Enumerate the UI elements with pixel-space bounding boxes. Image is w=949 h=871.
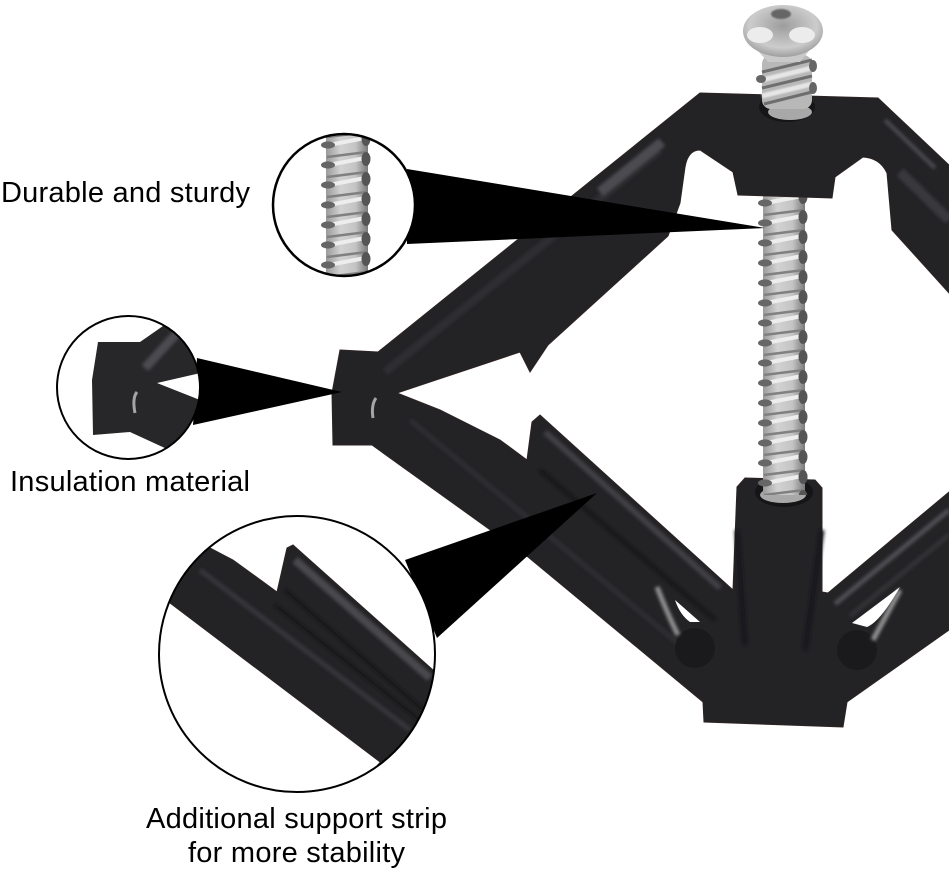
- screw: neck, collar and head: [743, 5, 823, 122]
- label: durable and sturdy: Durable and sturdy: [1, 177, 250, 209]
- pointer wedge: strip: [405, 493, 597, 638]
- label: additional support strip: Additional support strip: [146, 803, 447, 835]
- anchor product photo: [332, 5, 949, 727]
- callout: insulation material: [10, 316, 342, 498]
- pointer wedge: screw: [407, 169, 765, 244]
- anchor ridges and highlights: [385, 120, 949, 650]
- left slot: [657, 587, 715, 668]
- callout: additional support strip: [146, 493, 597, 869]
- magnifier: support strip: [158, 515, 436, 793]
- label: for more stability: for more stability: [188, 837, 406, 869]
- right slot: [837, 587, 900, 670]
- post screw entry and collar: [755, 469, 813, 507]
- pointer wedge: block: [193, 358, 342, 425]
- label: insulation material: Insulation material: [10, 466, 250, 498]
- magnifier: screw thread: [273, 131, 415, 291]
- insulation mark: [372, 398, 376, 418]
- anchor body: [332, 93, 949, 727]
- screw: threaded shaft: [758, 189, 810, 499]
- magnifier: corner block: [57, 316, 205, 460]
- callout: durable and sturdy: [1, 131, 765, 291]
